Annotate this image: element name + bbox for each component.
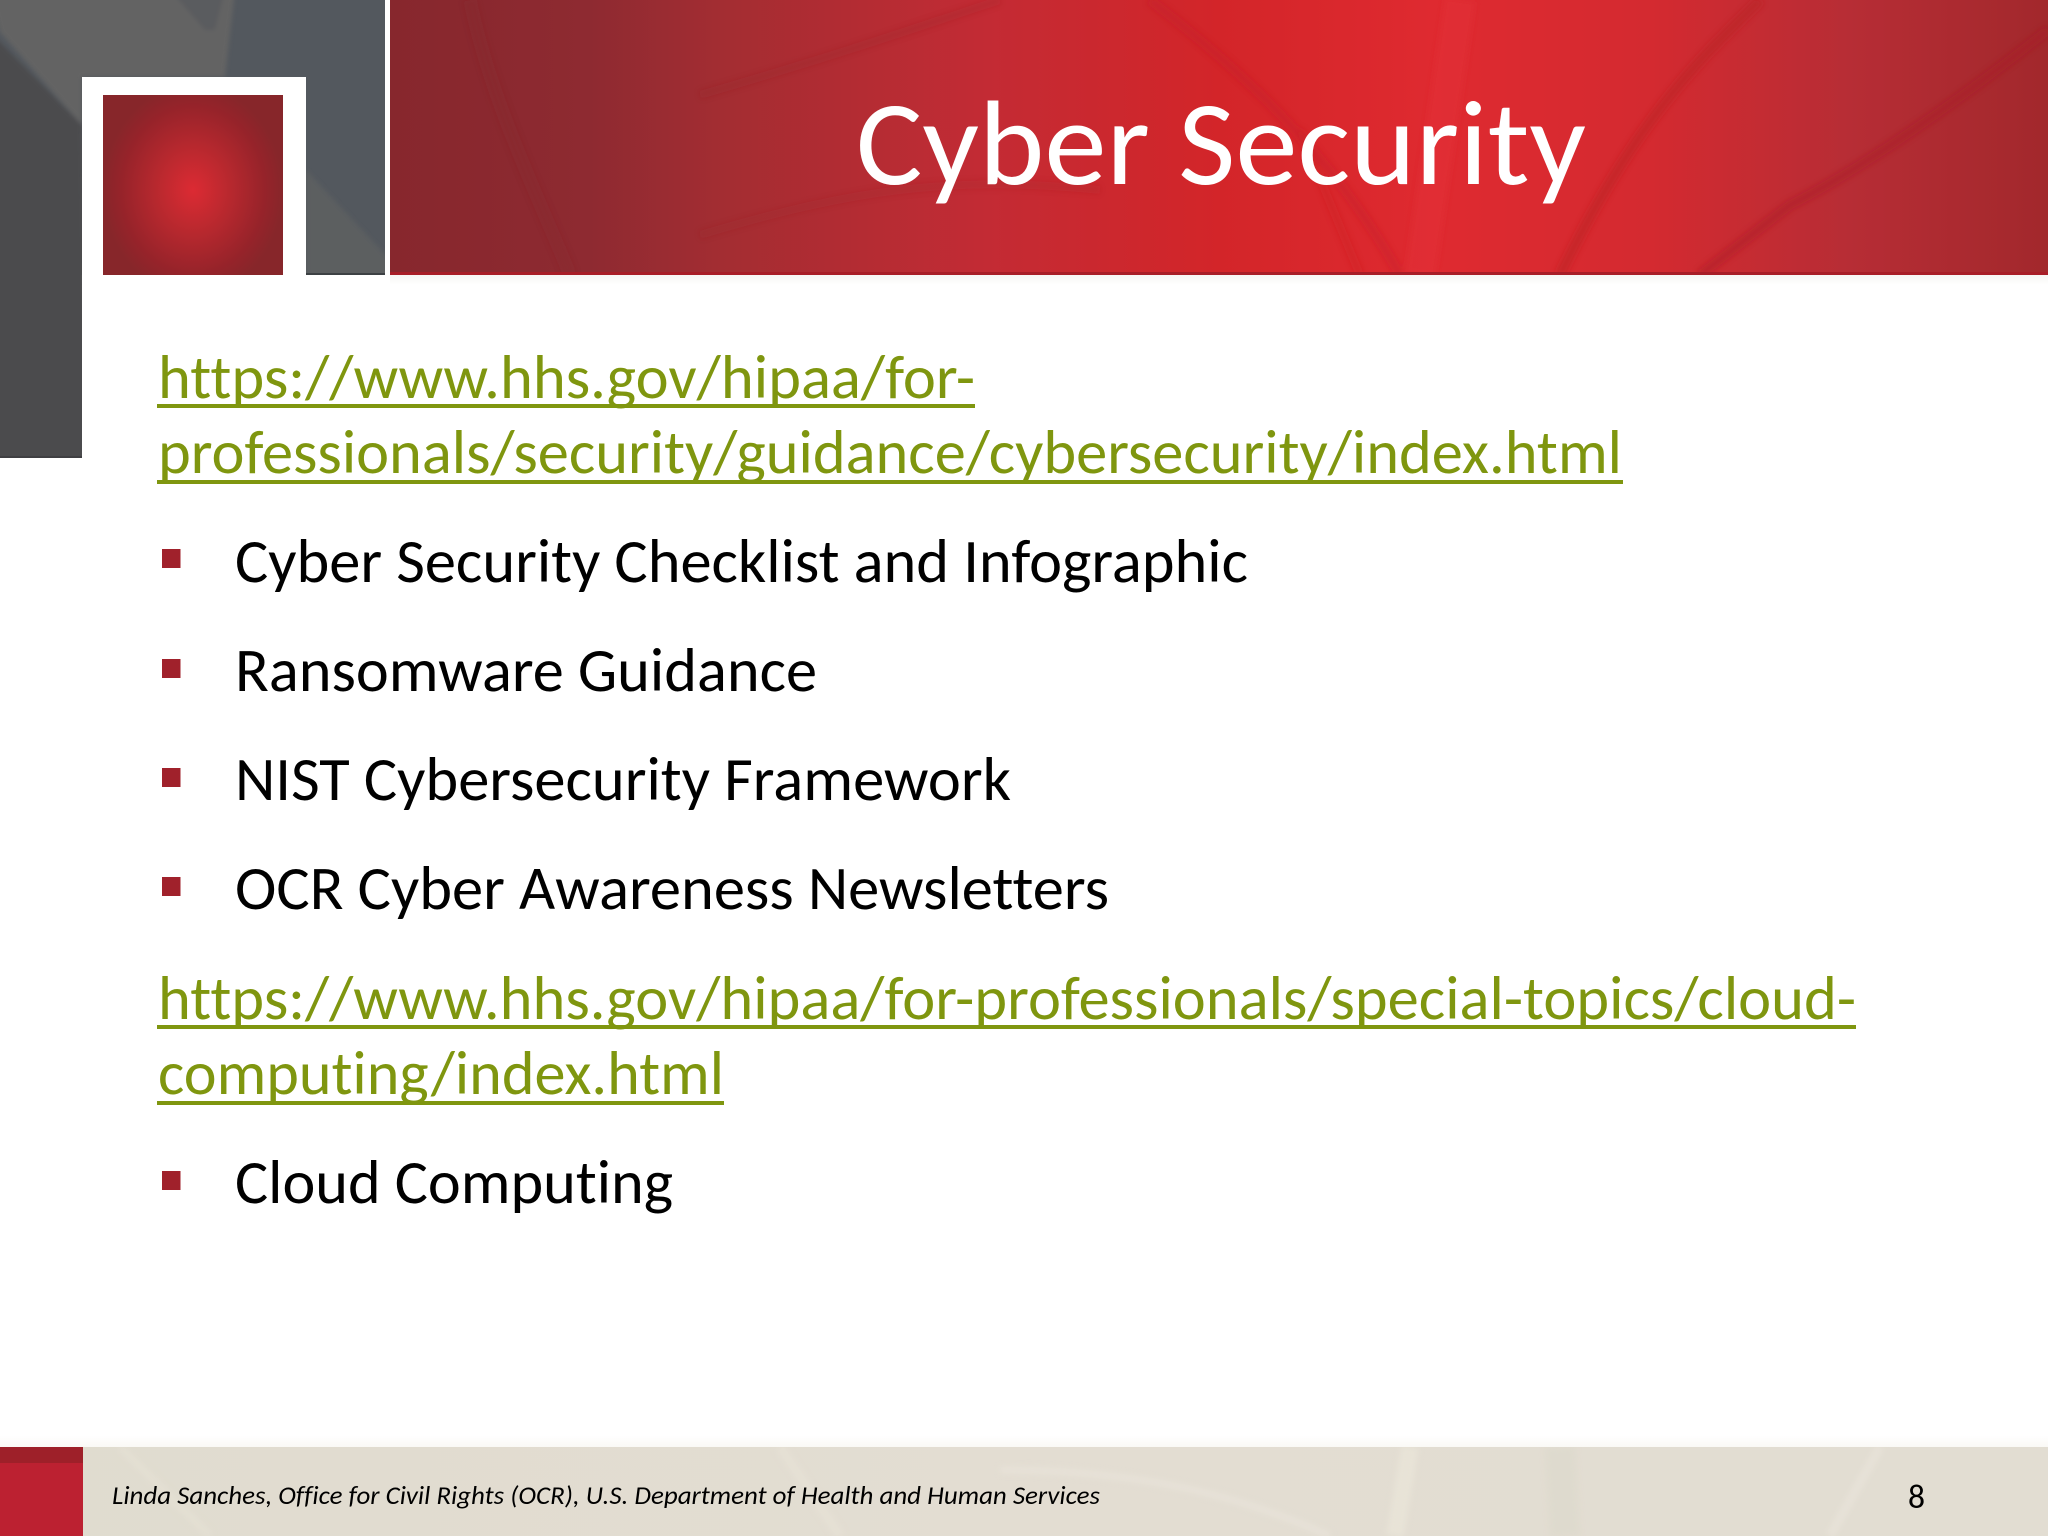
link: cloud computing URL: computing/index.html xyxy=(158,1035,724,1111)
panel: soft shadow under banner xyxy=(390,275,2048,285)
bullet: Cyber Security Checklist and Infographic: Cyber Security Checklist and Infographic xyxy=(235,523,1248,599)
bullet: OCR Cyber Awareness Newsletters: OCR Cyber Awareness Newsletters xyxy=(235,850,1109,926)
link: cybersecurity guidance URL: professionals/security/guidance/cybersecurity/index.html xyxy=(158,414,1622,490)
bullet: Ransomware Guidance: Ransomware Guidance xyxy=(235,632,817,708)
panel: grey corner block xyxy=(0,0,395,470)
title: Cyber Security xyxy=(856,70,1586,217)
bullet: NIST Cybersecurity Framework: NIST Cybersecurity Framework xyxy=(235,741,1011,817)
link: cybersecurity guidance URL: https://www.hhs.gov/hipaa/for- xyxy=(158,339,975,415)
bullet: Cloud Computing: Cloud Computing xyxy=(235,1144,673,1220)
panel: white frame and red square xyxy=(82,77,306,287)
panel: footer band xyxy=(0,1435,2048,1536)
panel: red title banner xyxy=(390,0,2048,275)
link: cybersecurity guidance URL xyxy=(157,339,1623,490)
link: cloud computing URL: https://www.hhs.gov/hipaa/for-professionals/special-topics/cloud- xyxy=(158,960,1856,1036)
link: cloud computing URL xyxy=(157,960,1856,1111)
footer credit: Linda Sanches, Office for Civil Rights (OCR), U.S. Department of Health and Human Services xyxy=(112,1479,1100,1511)
page number: 8 xyxy=(1908,1477,1925,1518)
